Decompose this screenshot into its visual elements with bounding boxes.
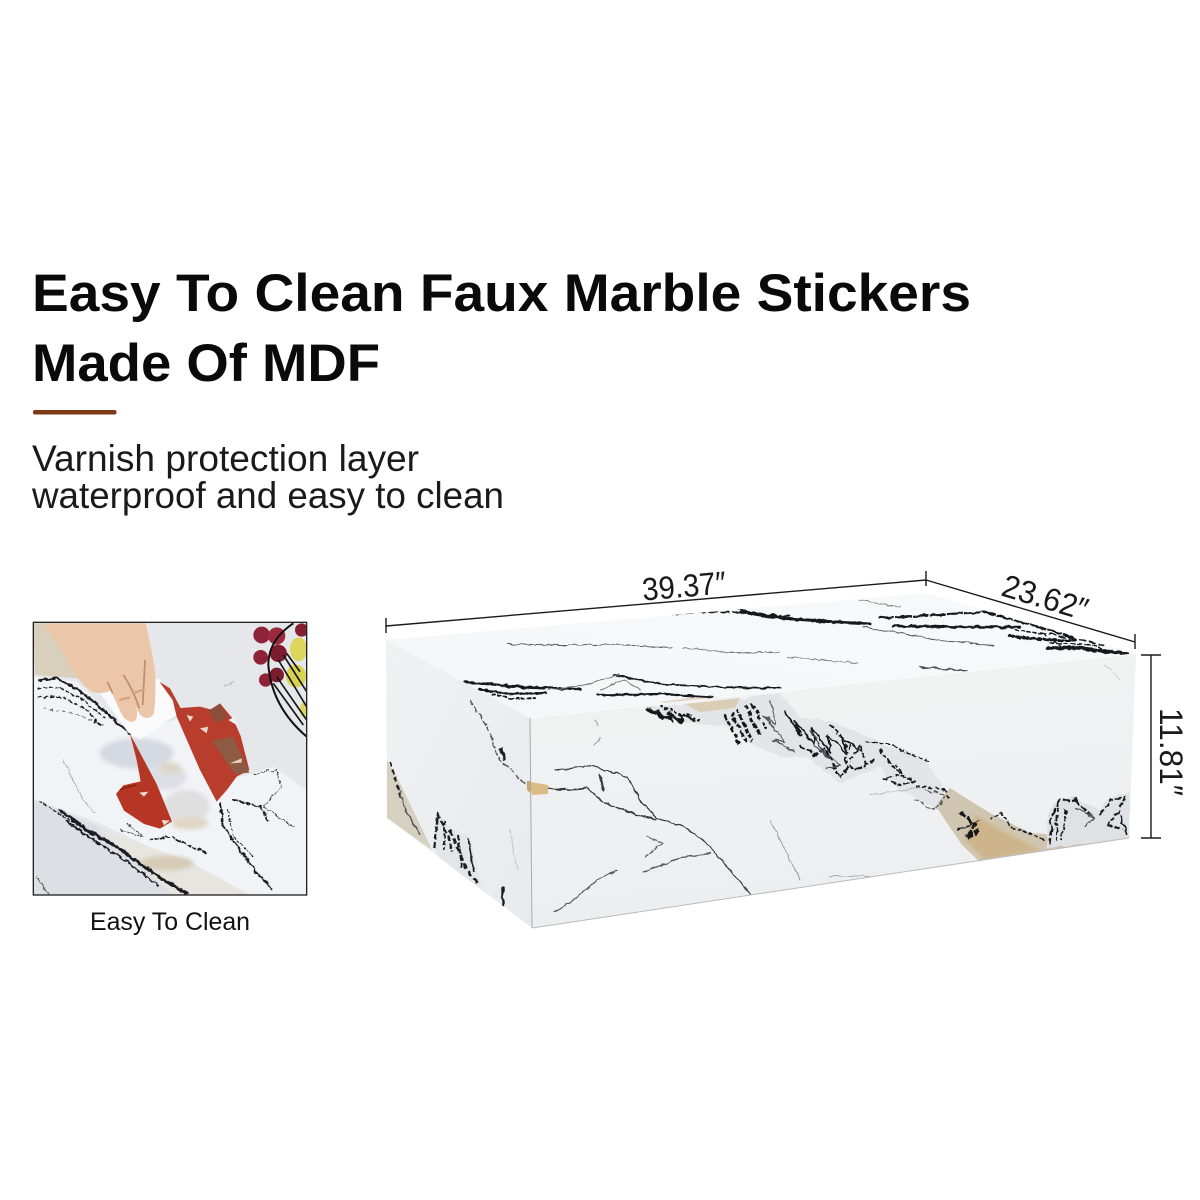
dimension: width: 39.37″ (641, 564, 727, 608)
marble surface (33, 677, 307, 895)
dimension: depth: 23.62″ (998, 567, 1093, 628)
marble cube table (386, 593, 1136, 928)
icon: eraser sponge (100, 678, 183, 739)
lower slab (34, 800, 172, 894)
panel: easy to clean photo (33, 622, 308, 895)
red smear right (159, 682, 249, 802)
right mountain vein (1047, 793, 1130, 848)
gold lower band (935, 788, 1129, 862)
subtitle text: waterproof and easy to clean (31, 475, 504, 516)
photo caption: Easy To Clean (90, 908, 250, 936)
fruit bowl with grapes (253, 623, 308, 737)
top face (386, 593, 1136, 718)
subtitle text: Varnish protection layer (32, 438, 419, 479)
thin veins (507, 644, 673, 648)
red smear left (116, 734, 172, 829)
front dark vein (465, 682, 580, 689)
left face (386, 640, 532, 928)
dimension: depth (926, 567, 1135, 649)
dimension: height: 11.81″ (1153, 708, 1189, 796)
marble veins (37, 678, 293, 893)
hand (44, 623, 156, 722)
title: Made Of MDF (32, 334, 380, 393)
corner seam (530, 718, 532, 928)
title (32, 264, 971, 393)
thin veins (545, 665, 1120, 912)
back dark vein (673, 612, 790, 616)
front edge highlight (530, 654, 1136, 718)
beige wall (33, 623, 78, 678)
photo frame (33, 622, 307, 895)
title: Easy To Clean Faux Marble Stickers (32, 264, 971, 323)
cloudy stain (100, 738, 210, 871)
dimension: height (1141, 655, 1189, 838)
subtitle text (31, 438, 504, 516)
mottled upper band (647, 693, 945, 810)
front face (530, 654, 1136, 928)
dimension: width (386, 564, 926, 633)
accent rule (33, 410, 116, 414)
